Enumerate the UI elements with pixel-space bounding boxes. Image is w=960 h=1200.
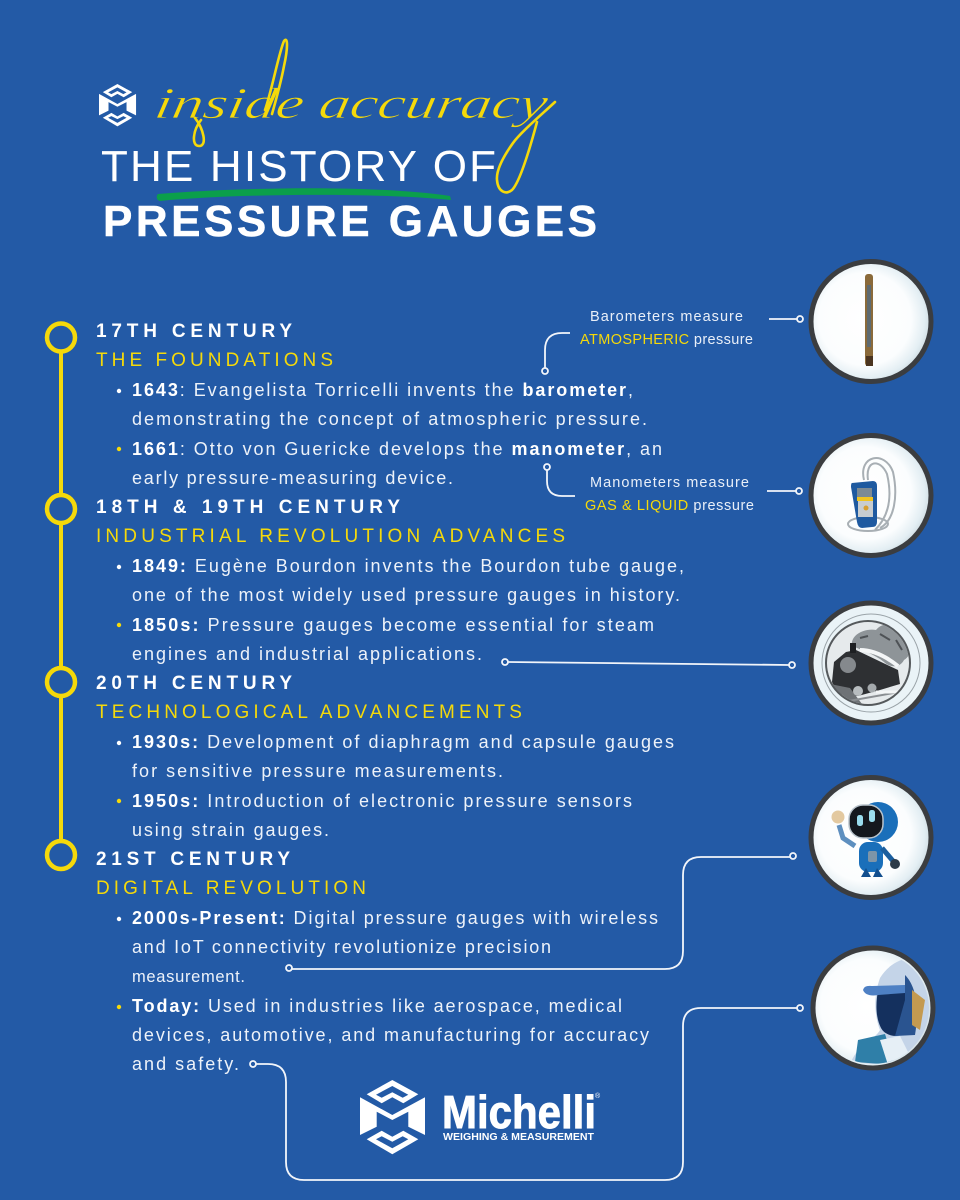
subheading: INDUSTRIAL REVOLUTION ADVANCES	[96, 526, 565, 547]
bullet text: 1950s: using strain gauges.	[132, 820, 329, 840]
bullet text: today: and safety.	[132, 1054, 239, 1074]
icon: steam train medallion	[811, 603, 931, 723]
bullet text: 1643: 1643: Evangelista Torricelli invents the barometer,	[132, 380, 633, 400]
bullet text: 1849	[117, 556, 684, 605]
bullet text: 1849: one of the most widely used pressure gauges in history.	[132, 585, 680, 605]
bullet text: 1643: demonstrating the concept of atmospheric pressure.	[132, 409, 647, 429]
timeline	[47, 324, 75, 869]
bullet text: 1930s: 1930s: Development of diaphragm and capsule gauges	[132, 732, 674, 752]
callout: manometers: GAS & LIQUID pressure	[585, 498, 754, 514]
bullet text: 1643	[117, 380, 647, 429]
heading: 21ST CENTURY	[96, 849, 290, 870]
bullet text: 1950s: 1950s: Introduction of electronic pressure sensors	[132, 791, 632, 811]
green brush underline	[157, 188, 451, 201]
heading: 20TH CENTURY	[96, 673, 292, 694]
bullet text: 2000s-present	[117, 908, 658, 986]
subheading: DIGITAL REVOLUTION	[96, 878, 366, 899]
callout: barometers: ATMOSPHERIC pressure	[580, 332, 753, 348]
wordmark: Michelli	[442, 1086, 596, 1138]
icon: manometer medallion	[811, 436, 931, 556]
bullet text: 1661: early pressure-measuring device.	[132, 468, 453, 488]
bullet text: 1850s: engines and industrial applications.	[132, 644, 482, 664]
footer Michelli logo	[360, 1080, 601, 1154]
bullet text: 1850s	[117, 615, 654, 664]
callout: barometers	[580, 309, 753, 348]
bullet text: 1930s	[117, 732, 674, 781]
heading: 18TH & 19TH CENTURY	[96, 497, 400, 518]
section: 20th century	[96, 673, 674, 840]
icon: robot medallion	[811, 778, 931, 898]
tagline: WEIGHING & MEASUREMENT	[443, 1131, 595, 1143]
bullet text: 2000s-present: 2000s-Present: Digital pressure gauges with wireless	[132, 908, 658, 928]
registered mark: ®	[595, 1092, 601, 1100]
heading: the history of: THE HISTORY OF	[101, 142, 496, 191]
bullet text: 1849: 1849: Eugène Bourdon invents the Bourdon tube gauge,	[132, 556, 684, 576]
script heading: inside accuracy: inside accuracy	[151, 78, 552, 128]
bullet text: 1850s: 1850s: Pressure gauges become essential for steam	[132, 615, 654, 635]
bullet text: 1661	[117, 439, 662, 488]
bullet text: 1950s	[117, 791, 632, 840]
heading: 17TH CENTURY	[96, 321, 292, 342]
section: 18th and 19th century	[96, 497, 684, 664]
section: 21st century	[96, 849, 658, 1074]
subheading: TECHNOLOGICAL ADVANCEMENTS	[96, 702, 522, 723]
bullet text: today	[117, 996, 649, 1074]
callout: barometers: Barometers measure	[590, 309, 743, 325]
callout: manometers	[585, 475, 754, 514]
subheading: THE FOUNDATIONS	[96, 350, 333, 371]
bullet text: 1930s: for sensitive pressure measurements.	[132, 761, 503, 781]
header title block	[99, 40, 597, 246]
section: 17th century	[96, 321, 662, 488]
icon: barometer medallion	[811, 262, 931, 382]
heading: pressure gauges: PRESSURE GAUGES	[103, 197, 597, 246]
bullet text: 2000s-present: and IoT connectivity revolutionize precision	[132, 937, 551, 957]
icon: worker medallion	[813, 948, 935, 1068]
bullet text: 2000s-present: measurement.	[132, 968, 245, 986]
callout: manometers: Manometers measure	[590, 475, 749, 491]
script heading: inside accuracy	[151, 40, 555, 192]
bullet text: today: devices, automotive, and manufacturing for accuracy	[132, 1025, 649, 1045]
icon: logo mark	[360, 1080, 425, 1154]
connector arrows	[250, 316, 803, 1180]
bullet text: today: Today: Used in industries like aerospace, medical	[132, 996, 622, 1016]
icon: small Michelli logo	[99, 84, 136, 126]
bullet text: 1661: 1661: Otto von Guericke develops the manometer, an	[132, 439, 662, 459]
